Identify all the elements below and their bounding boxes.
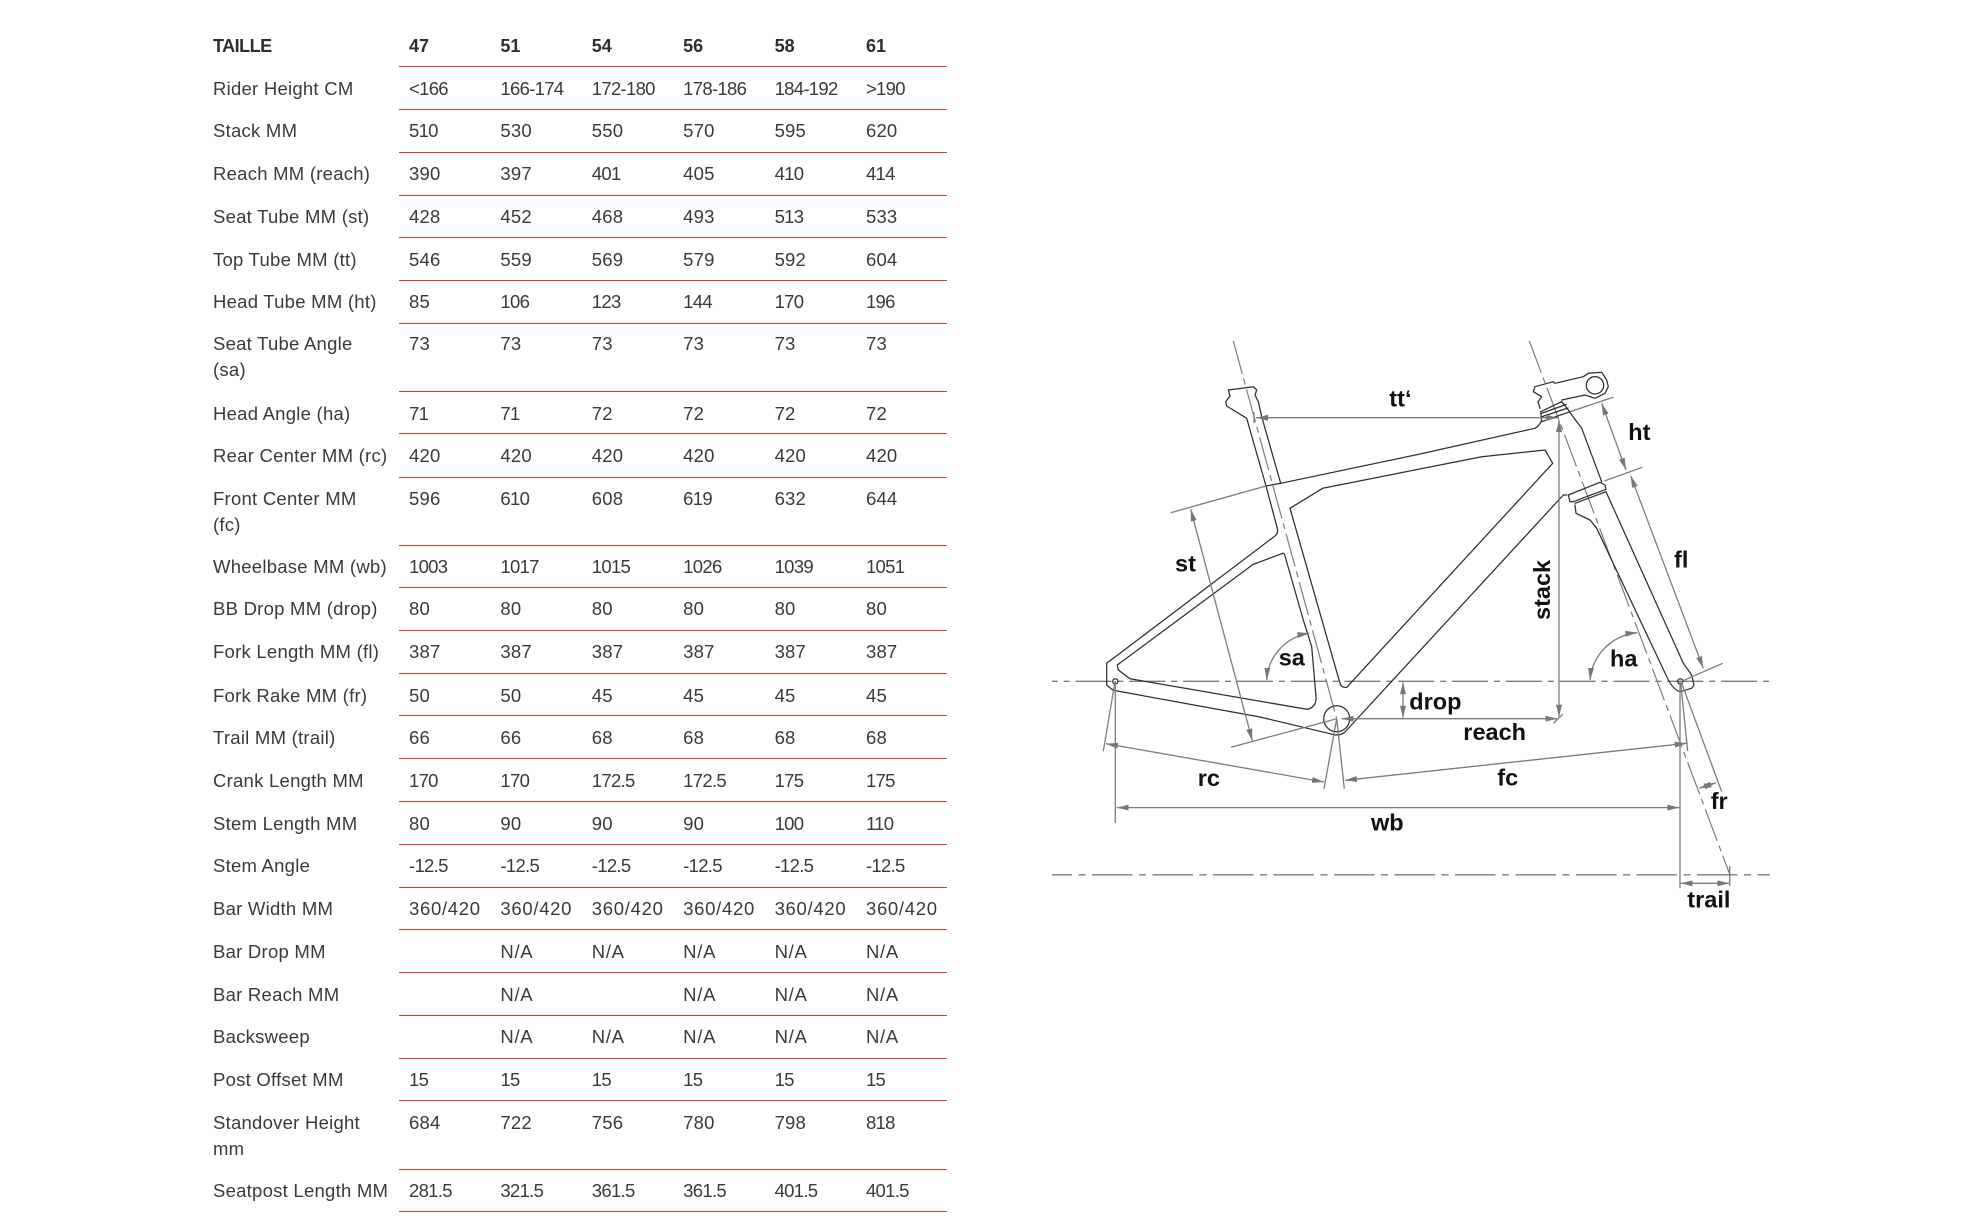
row: front center: Front Center MM xyxy=(213,488,357,509)
dimension: st: st xyxy=(1175,551,1196,577)
row: trail: 68 xyxy=(866,727,887,748)
row: bar width: 360/420 xyxy=(592,898,664,919)
row: fork length: 387 xyxy=(592,641,623,662)
row: trail: 66 xyxy=(409,727,430,748)
row: head angle: 71 xyxy=(409,403,428,424)
row: head tube: 85 xyxy=(409,291,430,312)
row: seat tube: 513 xyxy=(775,206,803,227)
table header: sizes: 54 xyxy=(592,36,612,56)
row: post offset: 15 xyxy=(409,1069,428,1090)
row: seat tube: 428 xyxy=(409,206,440,227)
row: stack: 595 xyxy=(775,120,806,141)
row: seat tube angle: 73 xyxy=(683,333,704,354)
rear axle xyxy=(1113,679,1118,684)
table header: sizes: 47 xyxy=(409,36,429,56)
row: head tube: 170 xyxy=(775,291,803,312)
dimension: ha: ha xyxy=(1610,646,1638,672)
dimension: seat tube extension lines xyxy=(1171,486,1337,747)
row: rider height: 184-192 xyxy=(775,78,838,99)
table header: sizes: 58 xyxy=(775,36,795,56)
row: head angle: 72 xyxy=(592,403,613,424)
row: wheelbase: Wheelbase MM (wb) xyxy=(213,556,387,577)
row: standover height: 722 xyxy=(500,1112,532,1133)
row: backsweep xyxy=(213,1015,957,1058)
row: bar width: 360/420 xyxy=(500,898,572,919)
row: stack: 570 xyxy=(683,120,715,141)
row: wheelbase: 1015 xyxy=(592,556,630,577)
row: front center: 610 xyxy=(500,488,529,509)
row: reach: 410 xyxy=(775,163,803,184)
row: standover height: mm xyxy=(213,1138,244,1159)
row: head tube: 106 xyxy=(500,291,529,312)
row: seatpost length: 281.5 xyxy=(409,1180,452,1201)
row: fork rake: 50 xyxy=(409,685,430,706)
row: seatpost length: 321.5 xyxy=(500,1180,543,1201)
row: standover height xyxy=(213,1100,957,1169)
row: bb drop: 80 xyxy=(500,598,521,619)
row: stem angle: -12.5 xyxy=(866,855,905,876)
row: rider height: >190 xyxy=(866,78,905,99)
row: seat tube: 452 xyxy=(500,206,532,227)
row: front center: 619 xyxy=(683,488,712,509)
row: stack: Stack MM xyxy=(213,120,297,141)
row: seatpost length: 401.5 xyxy=(866,1180,909,1201)
row: front center: 596 xyxy=(409,488,440,509)
row: rider height: 172-180 xyxy=(592,78,655,99)
dimension: fr xyxy=(1682,683,1728,814)
row: bb drop xyxy=(213,587,957,630)
row: standover height: 684 xyxy=(409,1112,440,1133)
geometry table xyxy=(213,36,947,1212)
row: post offset: 15 xyxy=(866,1069,885,1090)
table header: sizes: 56 xyxy=(683,36,703,56)
dimension: ha xyxy=(1590,633,1638,680)
dimension: drop: drop xyxy=(1409,688,1462,714)
row: bar width: 360/420 xyxy=(775,898,846,919)
row: wheelbase: 1003 xyxy=(409,556,447,577)
row: fork length: 387 xyxy=(500,641,532,662)
stem and handlebar clamp xyxy=(1533,372,1608,408)
row: stem angle: -12.5 xyxy=(409,855,448,876)
row: front center: (fc) xyxy=(213,514,241,535)
row: trail: 68 xyxy=(775,727,796,748)
row: stem length: 90 xyxy=(500,813,521,834)
row: bar reach: N/A xyxy=(500,984,533,1005)
row: rear center: 420 xyxy=(866,445,897,466)
row: seat tube: Seat Tube MM (st) xyxy=(213,206,369,227)
row: head tube: 144 xyxy=(683,291,712,312)
row: seat tube angle: (sa) xyxy=(213,359,246,380)
row: seat tube: 468 xyxy=(592,206,623,227)
row: head tube xyxy=(213,280,957,323)
row: top tube: 569 xyxy=(592,249,623,270)
row: rear center: 420 xyxy=(592,445,623,466)
table header: sizes: 61 xyxy=(866,36,886,56)
row: stack: 530 xyxy=(500,120,532,141)
row: backsweep: N/A xyxy=(500,1026,533,1047)
row: head angle: 72 xyxy=(866,403,887,424)
row: seat tube: 533 xyxy=(866,206,897,227)
row: reach: 405 xyxy=(683,163,715,184)
row: stem length: Stem Length MM xyxy=(213,813,357,834)
row: seatpost length: 361.5 xyxy=(683,1180,726,1201)
dimension: sa xyxy=(1267,633,1309,680)
row: stem length: 90 xyxy=(592,813,613,834)
dimension: tt: tt‘ xyxy=(1389,386,1411,412)
row: bar drop: N/A xyxy=(500,941,533,962)
row: crank length: 175 xyxy=(866,770,895,791)
row: standover height: Standover Height xyxy=(213,1112,360,1133)
table header: sizes xyxy=(213,24,957,66)
axis lines: horizontal and slanted centre lines xyxy=(1052,341,1770,875)
row: front center: 632 xyxy=(775,488,806,509)
row: wheelbase: 1051 xyxy=(866,556,904,577)
row: head angle: 72 xyxy=(775,403,796,424)
bottom bracket circle xyxy=(1324,706,1350,732)
row: rider height: Rider Height CM xyxy=(213,78,354,99)
row: fork length: 387 xyxy=(409,641,440,662)
dimension: rc xyxy=(1103,682,1337,791)
dimension: fl: fl xyxy=(1674,546,1688,572)
row: head angle: 72 xyxy=(683,403,704,424)
row: crank length: 175 xyxy=(775,770,803,791)
row: bar drop: Bar Drop MM xyxy=(213,941,326,962)
row: top tube: 579 xyxy=(683,249,715,270)
row: fork rake: 50 xyxy=(500,685,521,706)
row: seat tube angle xyxy=(213,323,957,391)
row: backsweep: Backsweep xyxy=(213,1026,310,1047)
row: wheelbase xyxy=(213,545,957,587)
dimension: fr: fr xyxy=(1711,788,1728,814)
row: crank length: 170 xyxy=(409,770,438,791)
row: fork length: 387 xyxy=(683,641,715,662)
row: stem angle: -12.5 xyxy=(500,855,539,876)
row: bar drop: N/A xyxy=(775,941,808,962)
row: seat tube: 493 xyxy=(683,206,715,227)
row: crank length xyxy=(213,758,957,801)
row: rear center xyxy=(213,433,957,477)
row: backsweep: N/A xyxy=(866,1026,899,1047)
row: top tube: 592 xyxy=(775,249,806,270)
row: stack: 550 xyxy=(592,120,623,141)
row: stem length: 100 xyxy=(775,813,803,834)
row: rear center: 420 xyxy=(775,445,806,466)
row: crank length: Crank Length MM xyxy=(213,770,364,791)
row: post offset: 15 xyxy=(592,1069,611,1090)
row: standover height: 818 xyxy=(866,1112,895,1133)
row: standover height: 798 xyxy=(775,1112,806,1133)
row: seatpost length: 361.5 xyxy=(592,1180,635,1201)
table header: sizes: TAILLE xyxy=(213,36,272,56)
row: front center: 608 xyxy=(592,488,623,509)
row: bar width: 360/420 xyxy=(409,898,481,919)
row: post offset: 15 xyxy=(775,1069,794,1090)
row: seat tube angle: 73 xyxy=(500,333,521,354)
row: seat tube angle: 73 xyxy=(409,333,430,354)
row: fork length: 387 xyxy=(866,641,897,662)
row: bar reach: N/A xyxy=(866,984,899,1005)
row: reach: 401 xyxy=(592,163,621,184)
row: bar drop: N/A xyxy=(592,941,625,962)
row: stem length: 110 xyxy=(866,813,893,834)
row: reach: 397 xyxy=(500,163,532,184)
row: reach: Reach MM (reach) xyxy=(213,163,370,184)
dimension: rc: rc xyxy=(1198,765,1220,791)
dimension: fc: fc xyxy=(1497,765,1518,791)
row: head tube: Head Tube MM (ht) xyxy=(213,291,377,312)
row: reach: 390 xyxy=(409,163,440,184)
row: stem angle: -12.5 xyxy=(683,855,722,876)
row: bar reach xyxy=(213,972,957,1015)
row: bar width: 360/420 xyxy=(866,898,938,919)
row: stem length: 90 xyxy=(683,813,704,834)
row: bar width: 360/420 xyxy=(683,898,755,919)
row: rear center: 420 xyxy=(500,445,532,466)
dimension: drop xyxy=(1403,682,1462,718)
row: backsweep: N/A xyxy=(592,1026,625,1047)
row: post offset: Post Offset MM xyxy=(213,1069,344,1090)
row: seat tube angle: 73 xyxy=(592,333,613,354)
row: head angle: 71 xyxy=(500,403,520,424)
row: bb drop: 80 xyxy=(409,598,430,619)
row: post offset: 15 xyxy=(683,1069,702,1090)
row: rider height: 166-174 xyxy=(500,78,563,99)
row: seat tube angle: 73 xyxy=(866,333,887,354)
row: bb drop: 80 xyxy=(592,598,613,619)
row: trail: 68 xyxy=(592,727,613,748)
row: reach xyxy=(213,152,957,195)
dimension: fc xyxy=(1337,683,1688,791)
row: rear center: 420 xyxy=(409,445,440,466)
row: trail: 68 xyxy=(683,727,704,748)
row: rear center: Rear Center MM (rc) xyxy=(213,445,387,466)
row: head angle: Head Angle (ha) xyxy=(213,403,350,424)
row: bar drop: N/A xyxy=(866,941,899,962)
row: bar width xyxy=(213,887,957,929)
row: bb drop: 80 xyxy=(775,598,796,619)
row: crank length: 170 xyxy=(500,770,529,791)
row: bar drop xyxy=(213,929,957,972)
row: seatpost length xyxy=(213,1169,957,1211)
row: rear center: 420 xyxy=(683,445,715,466)
dimension: reach: reach xyxy=(1463,719,1526,745)
row: bb drop: 80 xyxy=(683,598,704,619)
row: bar width: Bar Width MM xyxy=(213,898,333,919)
row: top tube xyxy=(213,237,957,280)
row: bar reach: Bar Reach MM xyxy=(213,984,339,1005)
row: wheelbase: 1026 xyxy=(683,556,722,577)
row: top tube: 604 xyxy=(866,249,897,270)
row: fork length: 387 xyxy=(775,641,806,662)
dimension: ht xyxy=(1570,397,1651,481)
row: bar drop: N/A xyxy=(683,941,716,962)
row: front center: 644 xyxy=(866,488,897,509)
row: top tube: 559 xyxy=(500,249,532,270)
row: stem length: 80 xyxy=(409,813,430,834)
row: stem angle xyxy=(213,844,957,887)
row: stack xyxy=(213,109,957,152)
row: crank length: 172.5 xyxy=(592,770,635,791)
row: head angle xyxy=(213,391,957,433)
row: fork rake: 45 xyxy=(592,685,613,706)
row: fork length: Fork Length MM (fl) xyxy=(213,641,379,662)
row: crank length: 172.5 xyxy=(683,770,726,791)
row: top tube: Top Tube MM (tt) xyxy=(213,249,357,270)
row: fork rake: 45 xyxy=(683,685,704,706)
row: seatpost length: 401.5 xyxy=(775,1180,817,1201)
row: stack: 620 xyxy=(866,120,897,141)
row: backsweep: N/A xyxy=(683,1026,716,1047)
row: fork rake xyxy=(213,673,957,715)
dimension: trail xyxy=(1681,866,1730,912)
row: bar reach: N/A xyxy=(683,984,716,1005)
row: wheelbase: 1017 xyxy=(500,556,539,577)
row: backsweep: N/A xyxy=(775,1026,808,1047)
row: seat tube angle: Seat Tube Angle xyxy=(213,333,353,354)
row: rider height: <166 xyxy=(409,78,448,99)
row: head tube: 196 xyxy=(866,291,895,312)
row: front center xyxy=(213,477,957,545)
row: seat tube angle: 73 xyxy=(775,333,796,354)
table header: sizes: 51 xyxy=(500,36,520,56)
row: trail: 66 xyxy=(500,727,521,748)
dimension: sa: sa xyxy=(1279,645,1306,671)
dimension: st xyxy=(1175,509,1252,741)
headset xyxy=(1541,402,1570,422)
row: trail xyxy=(213,715,957,758)
row: top tube: 546 xyxy=(409,249,440,270)
row: bb drop: 80 xyxy=(866,598,887,619)
row: seat tube xyxy=(213,195,957,237)
row: standover height: 780 xyxy=(683,1112,715,1133)
row: stack: 510 xyxy=(409,120,438,141)
dimension: stack: stack xyxy=(1529,559,1555,620)
row: stem angle: Stem Angle xyxy=(213,855,310,876)
frame outline xyxy=(1107,387,1567,735)
row: head tube: 123 xyxy=(592,291,621,312)
row: standover height: 756 xyxy=(592,1112,623,1133)
row: fork rake: 45 xyxy=(866,685,887,706)
row: wheelbase: 1039 xyxy=(775,556,813,577)
row: stem length xyxy=(213,801,957,844)
row: stem angle: -12.5 xyxy=(592,855,630,876)
row: stem angle: -12.5 xyxy=(775,855,813,876)
fork xyxy=(1568,412,1694,692)
row: fork length xyxy=(213,630,957,673)
row: seatpost length: Seatpost Length MM xyxy=(213,1180,388,1201)
row: bar reach: N/A xyxy=(775,984,808,1005)
row: bb drop: BB Drop MM (drop) xyxy=(213,598,378,619)
dimension: fl xyxy=(1631,476,1723,682)
row: trail: Trail MM (trail) xyxy=(213,727,336,748)
dimension: wb: wb xyxy=(1370,810,1404,836)
dimension: trail: trail xyxy=(1687,886,1730,912)
row: reach: 414 xyxy=(866,163,895,184)
dimension: ht: ht xyxy=(1628,419,1651,445)
row: post offset: 15 xyxy=(500,1069,520,1090)
row: rider height xyxy=(213,66,957,109)
row: fork rake: Fork Rake MM (fr) xyxy=(213,685,367,706)
row: fork rake: 45 xyxy=(775,685,796,706)
row: rider height: 178-186 xyxy=(683,78,746,99)
dimension: reach xyxy=(1342,714,1563,745)
row: post offset xyxy=(213,1058,957,1100)
